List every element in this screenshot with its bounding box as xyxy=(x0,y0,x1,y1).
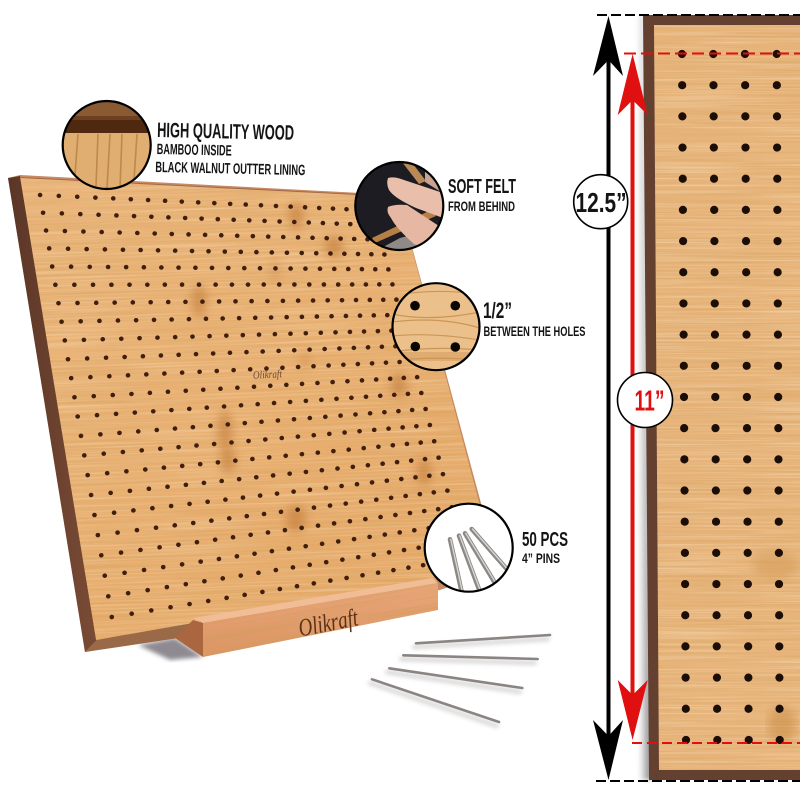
board outer edge xyxy=(8,175,499,652)
text: pins: 50 PCS xyxy=(522,529,568,551)
label: 11 inches xyxy=(618,372,672,428)
callout circle: pins close-up xyxy=(425,504,513,592)
text: high quality wood: BAMBOO INSIDE xyxy=(157,141,232,160)
label: 12.5 inches xyxy=(574,175,628,229)
loose pins xyxy=(370,635,550,726)
label: 11 inches: 11” xyxy=(634,386,664,418)
text: pins: 4” PINS xyxy=(522,550,560,566)
stand logo: Olikraft xyxy=(296,604,361,642)
text: pins xyxy=(522,529,568,566)
text: soft felt: SOFT FELT xyxy=(448,176,516,198)
callout circle: felt close-up xyxy=(354,160,446,252)
dashed guides xyxy=(596,15,800,781)
text: high quality wood: HIGH QUALITY WOOD xyxy=(157,119,294,145)
stand xyxy=(176,578,438,657)
arrow: 12.5 inch dimension xyxy=(593,16,623,780)
text: high quality wood xyxy=(155,119,306,179)
cast shadow xyxy=(138,638,203,660)
wood knots xyxy=(192,202,431,533)
walnut side band xyxy=(8,176,97,652)
text: half inch spacing: BETWEEN THE HOLES xyxy=(484,323,586,339)
text: soft felt: FROM BEHIND xyxy=(448,198,515,214)
board face xyxy=(20,177,480,640)
text: half inch spacing: 1/2” xyxy=(483,298,512,323)
label: 12.5 inches: 12.5” xyxy=(576,187,626,218)
callout circle: hole spacing xyxy=(390,282,482,372)
walnut frame xyxy=(643,15,800,780)
walnut bottom band xyxy=(85,622,192,652)
text: high quality wood: BLACK WALNUT OUTTER LINING xyxy=(155,159,306,179)
text: soft felt xyxy=(448,176,516,214)
arrow: 11 inch dimension xyxy=(618,54,648,740)
holes grid xyxy=(682,54,780,741)
small engraved logo: Olikraft xyxy=(253,368,283,382)
text: half inch spacing xyxy=(483,298,586,339)
peg holes xyxy=(40,195,478,617)
panel: board close-up with dimensions xyxy=(634,15,800,780)
product photo: blocking board on stand xyxy=(8,175,482,662)
callout circle: wood close-up xyxy=(60,100,154,193)
